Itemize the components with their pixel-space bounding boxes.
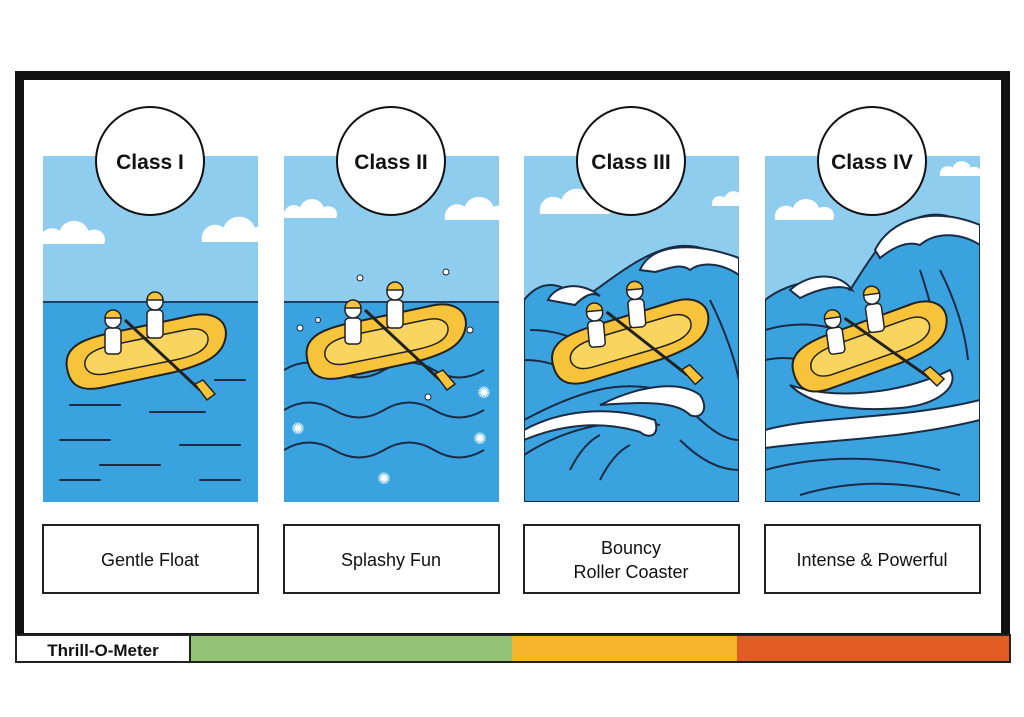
badge: Class I: Class I — [116, 151, 184, 174]
icon: clouds — [40, 217, 273, 244]
badge: Class III — [577, 107, 685, 215]
badge: Class I — [96, 107, 204, 215]
thrill-o-meter: Thrill-O-Meter — [47, 641, 159, 660]
badge: Class II — [337, 107, 445, 215]
icon: raft — [792, 285, 948, 392]
label: Intense & Powerful — [765, 525, 980, 593]
label: Gentle Float — [43, 525, 258, 593]
icon: clouds — [775, 161, 981, 220]
panel: Class III — [524, 156, 753, 502]
label: Bouncy Roller Coaster — [524, 525, 739, 593]
thrill-o-meter — [16, 635, 1010, 662]
label: Intense & Powerful: Intense & Powerful — [796, 550, 948, 570]
badge: Class IV — [818, 107, 926, 215]
panel: Class II: ✺ — [473, 431, 487, 448]
icon: raft — [551, 280, 710, 386]
badge: Class III: Class III — [591, 151, 671, 174]
label: Splashy Fun: Splashy Fun — [341, 550, 441, 570]
panel: Class IV — [765, 156, 981, 502]
panel: Class I — [40, 156, 273, 502]
panel: Class II: ✺ — [291, 421, 305, 438]
label: Bouncy Roller Coaster: Roller Coaster — [573, 562, 689, 582]
icon: clouds — [284, 197, 510, 220]
label: Splashy Fun — [284, 525, 499, 593]
label: Gentle Float: Gentle Float — [101, 550, 199, 570]
label: Bouncy Roller Coaster: Bouncy — [601, 538, 661, 558]
icon: clouds — [540, 189, 753, 214]
panel: Class II — [284, 156, 510, 502]
panel: Class II: ✺ — [377, 471, 391, 488]
icon: raft — [67, 292, 226, 400]
frame — [20, 76, 1006, 638]
icon: raft — [307, 282, 466, 390]
panel: Class II: ✺ — [477, 385, 491, 402]
badge: Class II: Class II — [354, 151, 428, 174]
badge: Class IV: Class IV — [831, 151, 913, 174]
